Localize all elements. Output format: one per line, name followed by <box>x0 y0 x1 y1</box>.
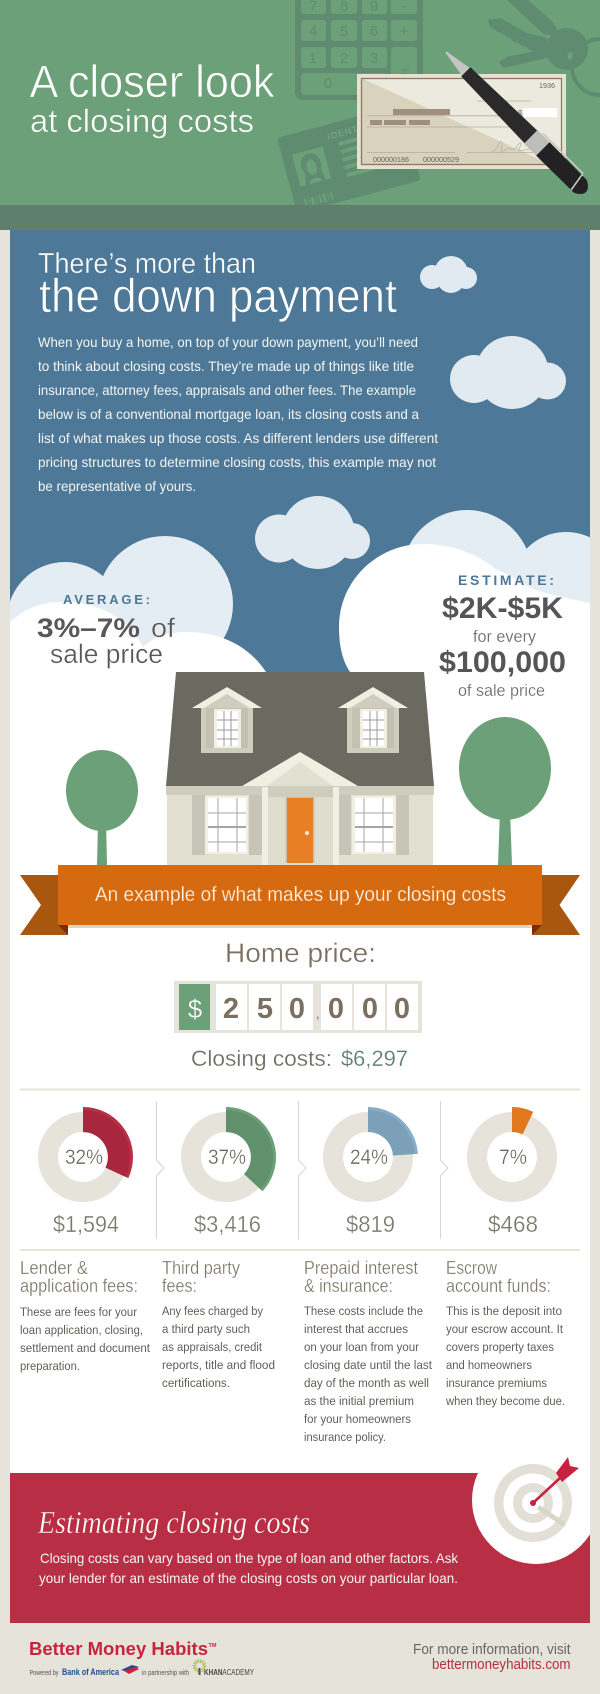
more information link <box>413 1642 570 1673</box>
icon: calculator: 2 <box>340 50 348 67</box>
callout: estimate: of sale price <box>458 681 545 700</box>
column: lender and application fees: preparation. <box>20 1359 80 1373</box>
column: third party fees: Third party <box>162 1258 240 1278</box>
column: third party fees: a third party such <box>162 1322 250 1336</box>
icon: bank check: 000000186 <box>373 157 409 164</box>
callout: estimate: $100,000 <box>439 646 566 679</box>
column: lender and application fees <box>20 1258 151 1373</box>
column: escrow account funds: This is the deposit into <box>446 1304 562 1318</box>
intro paragraph: list of what makes up those costs. As different lenders use different <box>38 430 438 446</box>
intro paragraph <box>38 334 438 494</box>
column: prepaid interest and insurance: for your homeowners <box>304 1412 411 1426</box>
column: escrow account funds: your escrow account. It <box>446 1322 564 1336</box>
donut chart: 32%: $1,594 <box>53 1211 119 1237</box>
heading: there's more than the down payment: the down payment <box>39 269 397 322</box>
intro paragraph: to think about closing costs. They’re made up of things like title <box>38 358 414 374</box>
cloud: medium <box>450 336 566 409</box>
intro paragraph: below is of a conventional mortgage loan, its closing costs and a <box>38 406 419 422</box>
price counter: $250,000: 0 <box>328 993 344 1025</box>
title: A closer look <box>30 56 275 107</box>
column: prepaid interest and insurance: These costs include the <box>304 1304 423 1318</box>
icon: khan tree <box>194 1661 204 1675</box>
closing costs total: Closing costs: <box>191 1046 332 1071</box>
title <box>30 56 275 139</box>
column: prepaid interest and insurance: closing date until the last <box>304 1358 433 1372</box>
column: prepaid interest and insurance <box>304 1258 433 1444</box>
column: prepaid interest and insurance: insurance policy. <box>304 1430 386 1444</box>
powered by line: KHANACADEMY <box>204 1668 255 1677</box>
column: lender and application fees: Lender & <box>20 1258 88 1278</box>
column: third party fees <box>162 1258 275 1390</box>
powered by line: Bank of America <box>62 1667 120 1678</box>
cloud: back right <box>409 510 590 603</box>
donut chart: 24%: $819 <box>346 1211 395 1237</box>
donut chart: 24%: 24% <box>350 1146 388 1169</box>
powered by line: Powered by <box>30 1670 59 1677</box>
icon: bank check: 1936 <box>539 83 555 90</box>
column: escrow account funds: when they become due. <box>445 1394 565 1408</box>
column: escrow account funds <box>445 1258 565 1408</box>
callout: estimate: $2K-$5K <box>442 592 563 625</box>
icon: calculator: 0 <box>324 75 332 92</box>
cloud: small <box>420 256 477 293</box>
ribbon banner <box>20 865 580 935</box>
callout: estimate <box>439 572 566 700</box>
intro paragraph: When you buy a home, on top of your down payment, you’ll need <box>38 334 418 350</box>
price counter: $250,000: 0 <box>362 993 378 1025</box>
logo: better money habits: TM <box>208 1643 217 1649</box>
icon: ID card <box>278 116 420 205</box>
price counter: $250,000: , <box>316 1006 320 1021</box>
left dormer <box>192 687 262 753</box>
icon: calculator: 1 <box>309 50 317 67</box>
panel: estimating closing costs <box>10 1457 590 1623</box>
intro paragraph: pricing structures to determine closing costs, this example may not <box>38 454 436 470</box>
more information link: bettermoneyhabits.com <box>432 1657 570 1673</box>
cloud: centre <box>255 496 370 569</box>
powered by line <box>30 1661 255 1678</box>
donut chart: 37% <box>191 1107 276 1237</box>
price counter: $250,000 <box>174 981 422 1033</box>
intro paragraph: be representative of yours. <box>38 478 196 494</box>
column: third party fees: as appraisals, credit <box>162 1340 263 1354</box>
donut chart: 7%: $468 <box>488 1211 538 1237</box>
column: third party fees: certifications. <box>162 1376 230 1390</box>
heading: home price: Home price: <box>225 938 376 968</box>
heading: there's more than the down payment: There’s more than <box>38 248 256 280</box>
donut chart: 7% <box>477 1107 547 1237</box>
donut chart: 7%: 7% <box>499 1146 527 1169</box>
icon: bank check: $ <box>518 109 523 118</box>
icon: target with arrow <box>472 1457 590 1564</box>
right window <box>339 795 409 855</box>
closing costs total: $6,297 <box>341 1046 408 1071</box>
price counter: $250,000: 0 <box>289 993 305 1025</box>
icon: flag <box>121 1665 139 1674</box>
callout: estimate: for every <box>473 627 536 646</box>
left window <box>192 795 262 855</box>
column: prepaid interest and insurance: interest that accrues <box>304 1322 408 1336</box>
donut chart: 37%: $3,416 <box>194 1211 261 1237</box>
callout: average <box>37 592 176 669</box>
porch gable <box>242 752 358 865</box>
icon: bank check <box>357 74 566 169</box>
estimating body text: your lender for an estimate of the closing costs on your particular loan. <box>39 1570 458 1586</box>
column: escrow account funds: account funds: <box>446 1276 551 1296</box>
price counter: $250,000: 5 <box>257 993 273 1025</box>
right dormer <box>338 687 408 753</box>
header banner <box>0 0 600 213</box>
ribbon banner: An example of what makes up your closing costs <box>95 883 506 906</box>
column: escrow account funds: insurance premiums <box>446 1376 547 1390</box>
door <box>286 797 314 863</box>
price counter: $250,000: 2 <box>223 993 239 1025</box>
powered by line: in partnership with <box>142 1670 189 1677</box>
estimating body text: Closing costs can vary based on the type of loan and other factors. Ask <box>40 1550 459 1566</box>
column: lender and application fees: loan application, closing, <box>20 1323 143 1337</box>
column: prepaid interest and insurance: & insurance: <box>304 1276 393 1296</box>
intro paragraph: insurance, attorney fees, appraisals and other fees. The example <box>38 382 416 398</box>
callout: average: sale price <box>50 639 163 669</box>
column: prepaid interest and insurance: as the initial premium <box>304 1394 414 1408</box>
column: prepaid interest and insurance: Prepaid interest <box>304 1258 418 1278</box>
icon: calculator: + <box>400 23 409 40</box>
column: escrow account funds: and homeowners <box>446 1358 532 1372</box>
more information link: For more information, visit <box>413 1642 570 1658</box>
heading: estimating closing costs: Estimating closing costs <box>37 1504 310 1540</box>
column: third party fees: reports, title and flood <box>162 1358 275 1372</box>
title: at closing costs <box>30 103 254 139</box>
icon: calculator: 5 <box>340 23 348 40</box>
column: escrow account funds: covers property taxes <box>446 1340 554 1354</box>
column: third party fees: fees: <box>162 1276 197 1296</box>
icon: calculator: = <box>401 64 410 81</box>
logo: better money habits: Better Money Habits <box>29 1638 208 1659</box>
illustration: right tree <box>459 717 551 865</box>
price counter: $250,000: 0 <box>394 993 410 1025</box>
callout: average: 3%–7% <box>37 613 140 643</box>
column: third party fees: Any fees charged by <box>162 1304 264 1318</box>
icon: ID card: IDENTI <box>326 123 363 142</box>
cloud: front right <box>339 544 590 680</box>
icon: calculator: 4 <box>309 23 317 40</box>
callout: average: of <box>151 613 176 643</box>
illustration: left tree <box>66 750 138 865</box>
donut chart: 37%: 37% <box>208 1146 246 1169</box>
heading: there's more than the down payment <box>38 248 397 322</box>
icon: keys <box>488 0 600 95</box>
estimating body text <box>39 1550 459 1586</box>
header ground band <box>0 205 600 230</box>
icon: calculator: 6 <box>370 23 378 40</box>
column: prepaid interest and insurance: on your loan from your <box>304 1340 419 1354</box>
icon: calculator <box>295 0 423 100</box>
column: escrow account funds: Escrow <box>446 1258 498 1278</box>
donut chart: 24% <box>333 1107 418 1237</box>
callout: estimate: ESTIMATE: <box>458 572 554 588</box>
column: lender and application fees: These are fees for your <box>20 1305 137 1319</box>
column: lender and application fees: settlement and document <box>20 1341 151 1355</box>
price counter: $250,000: $ <box>188 994 203 1024</box>
donut chart: 32%: 32% <box>65 1146 103 1169</box>
cloud: front left <box>10 602 266 680</box>
cloud: back left <box>10 536 233 647</box>
icon: calculator: 3 <box>370 50 378 67</box>
icon: bank check: 000000529 <box>423 157 459 164</box>
illustration: house <box>166 672 434 865</box>
footer <box>29 1638 570 1678</box>
donut chart: 32% <box>48 1107 133 1237</box>
column: lender and application fees: application fees: <box>20 1276 138 1296</box>
callout: average: AVERAGE: <box>63 592 150 607</box>
icon: pen <box>439 44 594 199</box>
column: prepaid interest and insurance: day of the month as well <box>304 1376 429 1390</box>
closing costs total <box>192 1049 407 1070</box>
